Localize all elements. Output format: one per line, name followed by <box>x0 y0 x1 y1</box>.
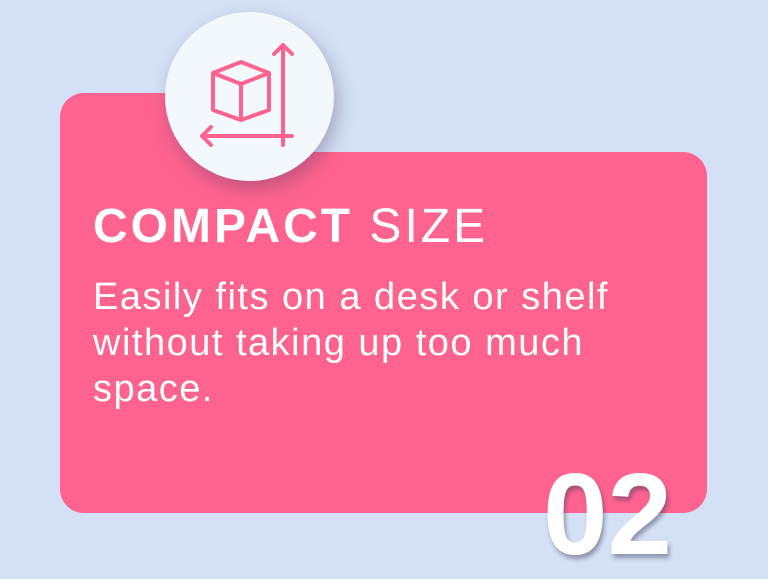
card <box>60 93 707 513</box>
body text: Easily fits on a desk or shelf without taking up too much space. <box>93 276 609 410</box>
number 02: 02 <box>543 449 672 579</box>
icon circle <box>165 12 334 181</box>
icon: cube with axes <box>200 42 294 148</box>
heading: COMPACT SIZE <box>93 200 488 253</box>
